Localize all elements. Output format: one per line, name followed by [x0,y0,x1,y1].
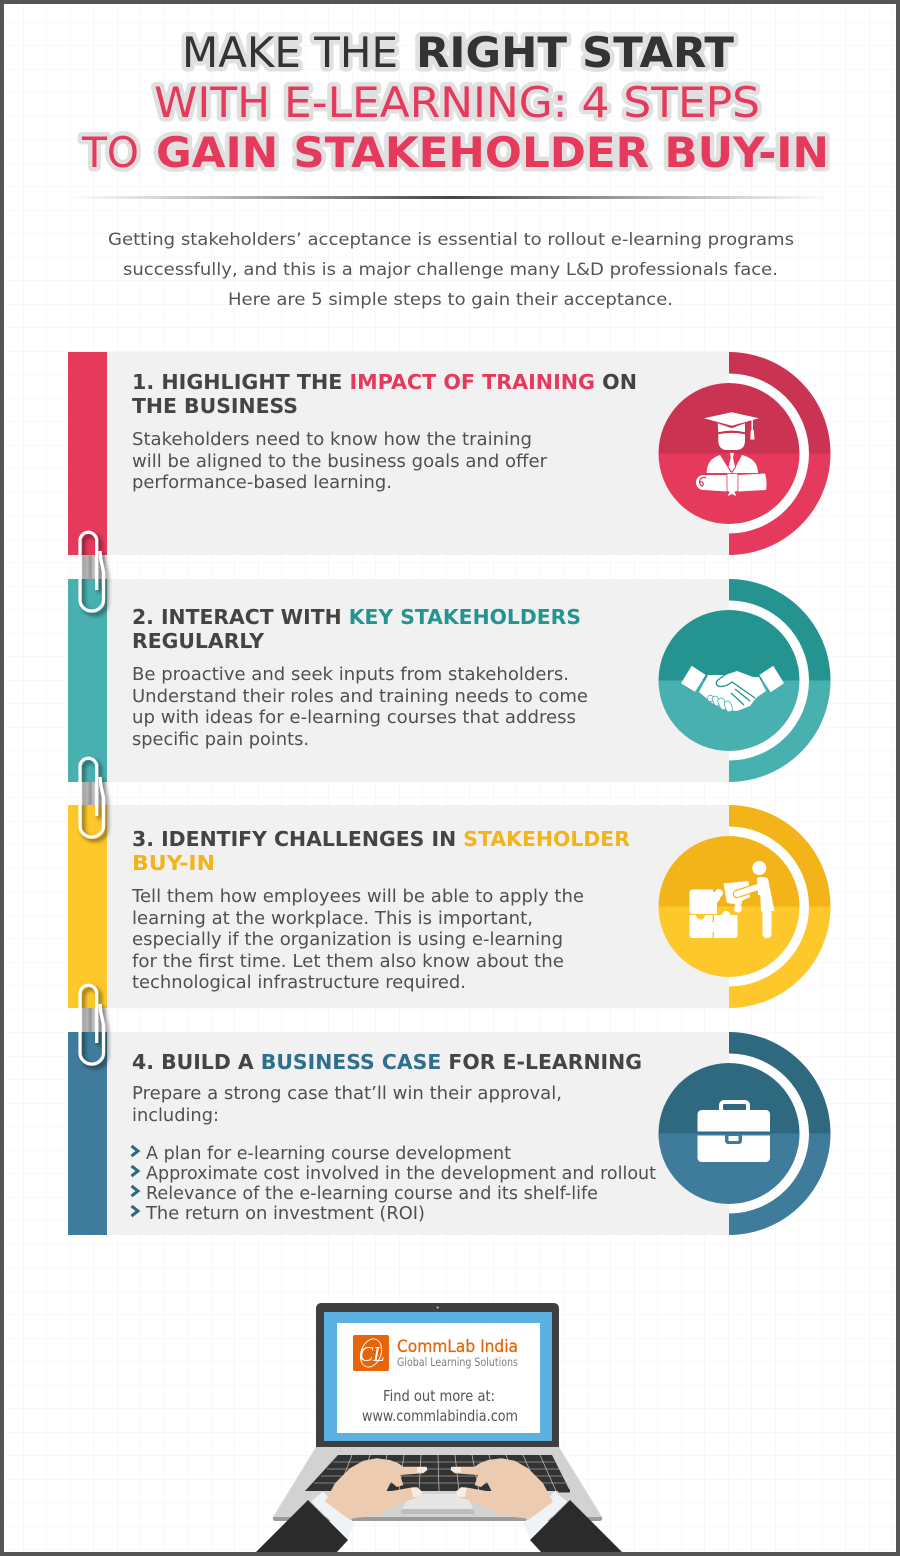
panel: step 3 [68,805,830,1008]
paperclip 1 [80,532,107,611]
title: RIGHT START [416,28,734,77]
paperclip 3 [80,985,107,1064]
laptop lid [316,1303,559,1447]
intro text: Here are 5 simple steps to gain their acceptance. [228,290,673,310]
intro text [108,230,794,310]
step 2 body text: specific pain points. [132,730,309,750]
step 1 body text: Stakeholders need to know how the training [132,430,532,450]
step 3 body text: especially if the organization is using e-learning [132,930,563,950]
step 3 heading: BUY-IN [132,851,215,875]
step 2 body text: Understand their roles and training needs to come [132,687,588,707]
title: MAKE THE [182,28,398,77]
step 4 body text: Prepare a strong case that’ll win their approval, [132,1084,562,1104]
step 2 body text [132,665,588,750]
step 1 heading: THE BUSINESS [132,394,298,418]
step 1 heading: 1. HIGHLIGHT THE IMPACT OF TRAINING ON [132,370,637,394]
step 4 ring and circle [658,1032,830,1235]
step 1 heading [132,370,637,418]
call to action: Find out more at: [383,1387,495,1405]
call to action [362,1387,518,1425]
step 3 body text: learning at the workplace. This is important, [132,909,533,929]
laptop illustration [256,1303,622,1552]
logo [353,1335,518,1371]
panel: step 4 [68,1032,830,1235]
step 3 body text [131,887,584,993]
panel: step 1 [68,352,830,555]
keyboard [305,1455,570,1492]
step 4 bullet list [132,1144,656,1224]
step 3 ring and circle [658,805,830,1008]
call to action: www.commlabindia.com [362,1407,518,1425]
step 2 ring and circle [658,579,830,782]
left hand and arm [256,1458,427,1552]
title [81,28,829,177]
right hand and arm [451,1458,622,1552]
step 1 body text [132,430,548,493]
icon: person with puzzle [689,861,774,938]
logo: CommLab India [397,1337,518,1357]
step 2 heading [132,605,581,653]
step 4 body text [132,1084,562,1126]
step 4 bullet list: Relevance of the e-learning course and its shelf-life [146,1184,598,1204]
icon: handshake [681,666,784,713]
step 2 heading: REGULARLY [132,629,265,653]
step 1 ring and circle [658,352,830,555]
step 1 body text: performance-based learning. [132,473,392,493]
step 3 body text: for the first time. Let them also know about the [132,952,564,972]
step 4 bullet list: The return on investment (ROI) [145,1204,425,1224]
title: WITH E-LEARNING: 4 STEPS [154,78,760,127]
panel: step 2 [68,579,830,782]
step 4 heading: 4. BUILD A BUSINESS CASE FOR E-LEARNING [132,1050,642,1074]
step 4 bullet list: A plan for e-learning course development [146,1144,511,1164]
step 3 body text: Tell them how employees will be able to apply the [131,887,584,907]
title: GAIN STAKEHOLDER BUY-IN [156,128,829,177]
step 3 heading: 3. IDENTIFY CHALLENGES IN STAKEHOLDER [132,827,630,851]
title: TO [81,128,139,177]
laptop base [273,1447,602,1521]
intro text: successfully, and this is a major challenge many L&D professionals face. [123,260,778,280]
step 3 body text: technological infrastructure required. [132,973,466,993]
icon: graduate [696,412,767,497]
step 4 bullet list: Approximate cost involved in the development and rollout [146,1164,656,1184]
step 1 body text: will be aligned to the business goals and offer [132,452,548,472]
step 2 heading: 2. INTERACT WITH KEY STAKEHOLDERS [132,605,581,629]
intro text: Getting stakeholders’ acceptance is essential to rollout e-learning programs [108,230,794,250]
logo: Global Learning Solutions [397,1355,518,1369]
paperclip 2 [80,758,107,837]
logo: CL [359,1342,385,1366]
step 2 body text: Be proactive and seek inputs from stakeholders. [132,665,569,685]
step 2 body text: up with ideas for e-learning courses that address [132,708,576,728]
icon: briefcase [698,1102,770,1162]
step 4 body text: including: [132,1106,219,1126]
step 3 heading [132,827,630,875]
